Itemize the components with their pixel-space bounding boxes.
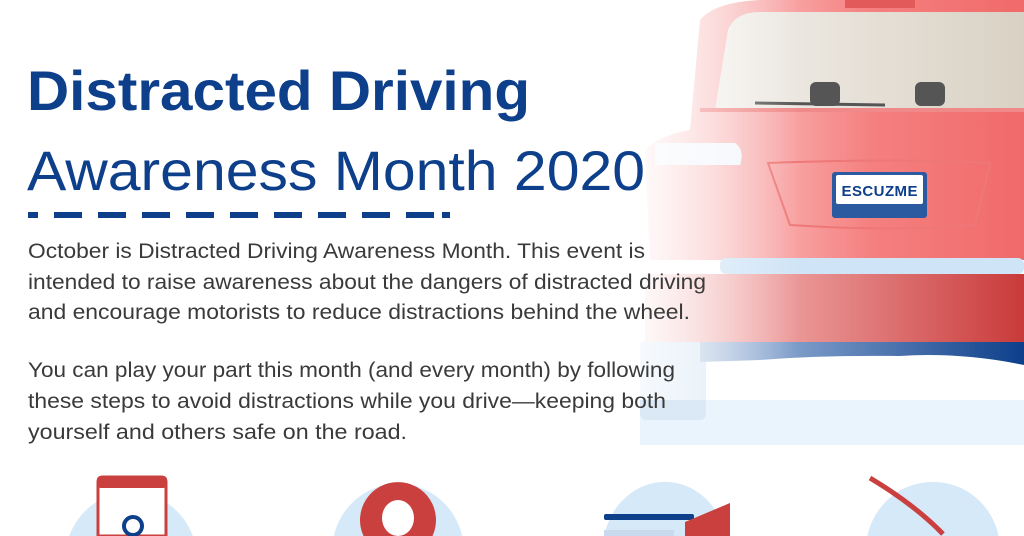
brake light	[845, 0, 915, 8]
lower body	[645, 274, 1024, 342]
title	[27, 59, 645, 202]
icon: location pin	[334, 482, 462, 536]
bumper strip	[720, 258, 1024, 274]
icon: phone	[69, 476, 193, 536]
license plate	[832, 172, 927, 218]
intro paragraph	[28, 240, 706, 324]
intro paragraph: and encourage motorists to reduce distractions behind the wheel.	[28, 301, 690, 324]
left fade	[600, 0, 800, 400]
license plate: ESCUZME	[842, 183, 918, 200]
dashed divider	[28, 212, 450, 218]
icon: curve	[867, 478, 999, 536]
car illustration	[600, 0, 1024, 445]
second paragraph	[28, 359, 675, 444]
taillight	[655, 143, 742, 165]
intro paragraph: intended to raise awareness about the dangers of distracted driving	[28, 271, 706, 294]
title: Distracted Driving	[27, 59, 530, 122]
icon: message	[604, 482, 730, 536]
second paragraph: these steps to avoid distractions while you drive—keeping both	[28, 390, 666, 413]
second paragraph: yourself and others safe on the road.	[28, 421, 407, 444]
second paragraph: You can play your part this month (and every month) by following	[28, 359, 675, 382]
rear window	[715, 12, 1024, 110]
title: Awareness Month 2020	[27, 139, 645, 202]
navy strip	[700, 342, 1024, 365]
intro paragraph: October is Distracted Driving Awareness Month. This event is	[28, 240, 645, 263]
tire	[640, 340, 706, 420]
shadow	[640, 400, 1024, 445]
trunk line	[768, 160, 990, 228]
body upper	[645, 0, 1024, 260]
